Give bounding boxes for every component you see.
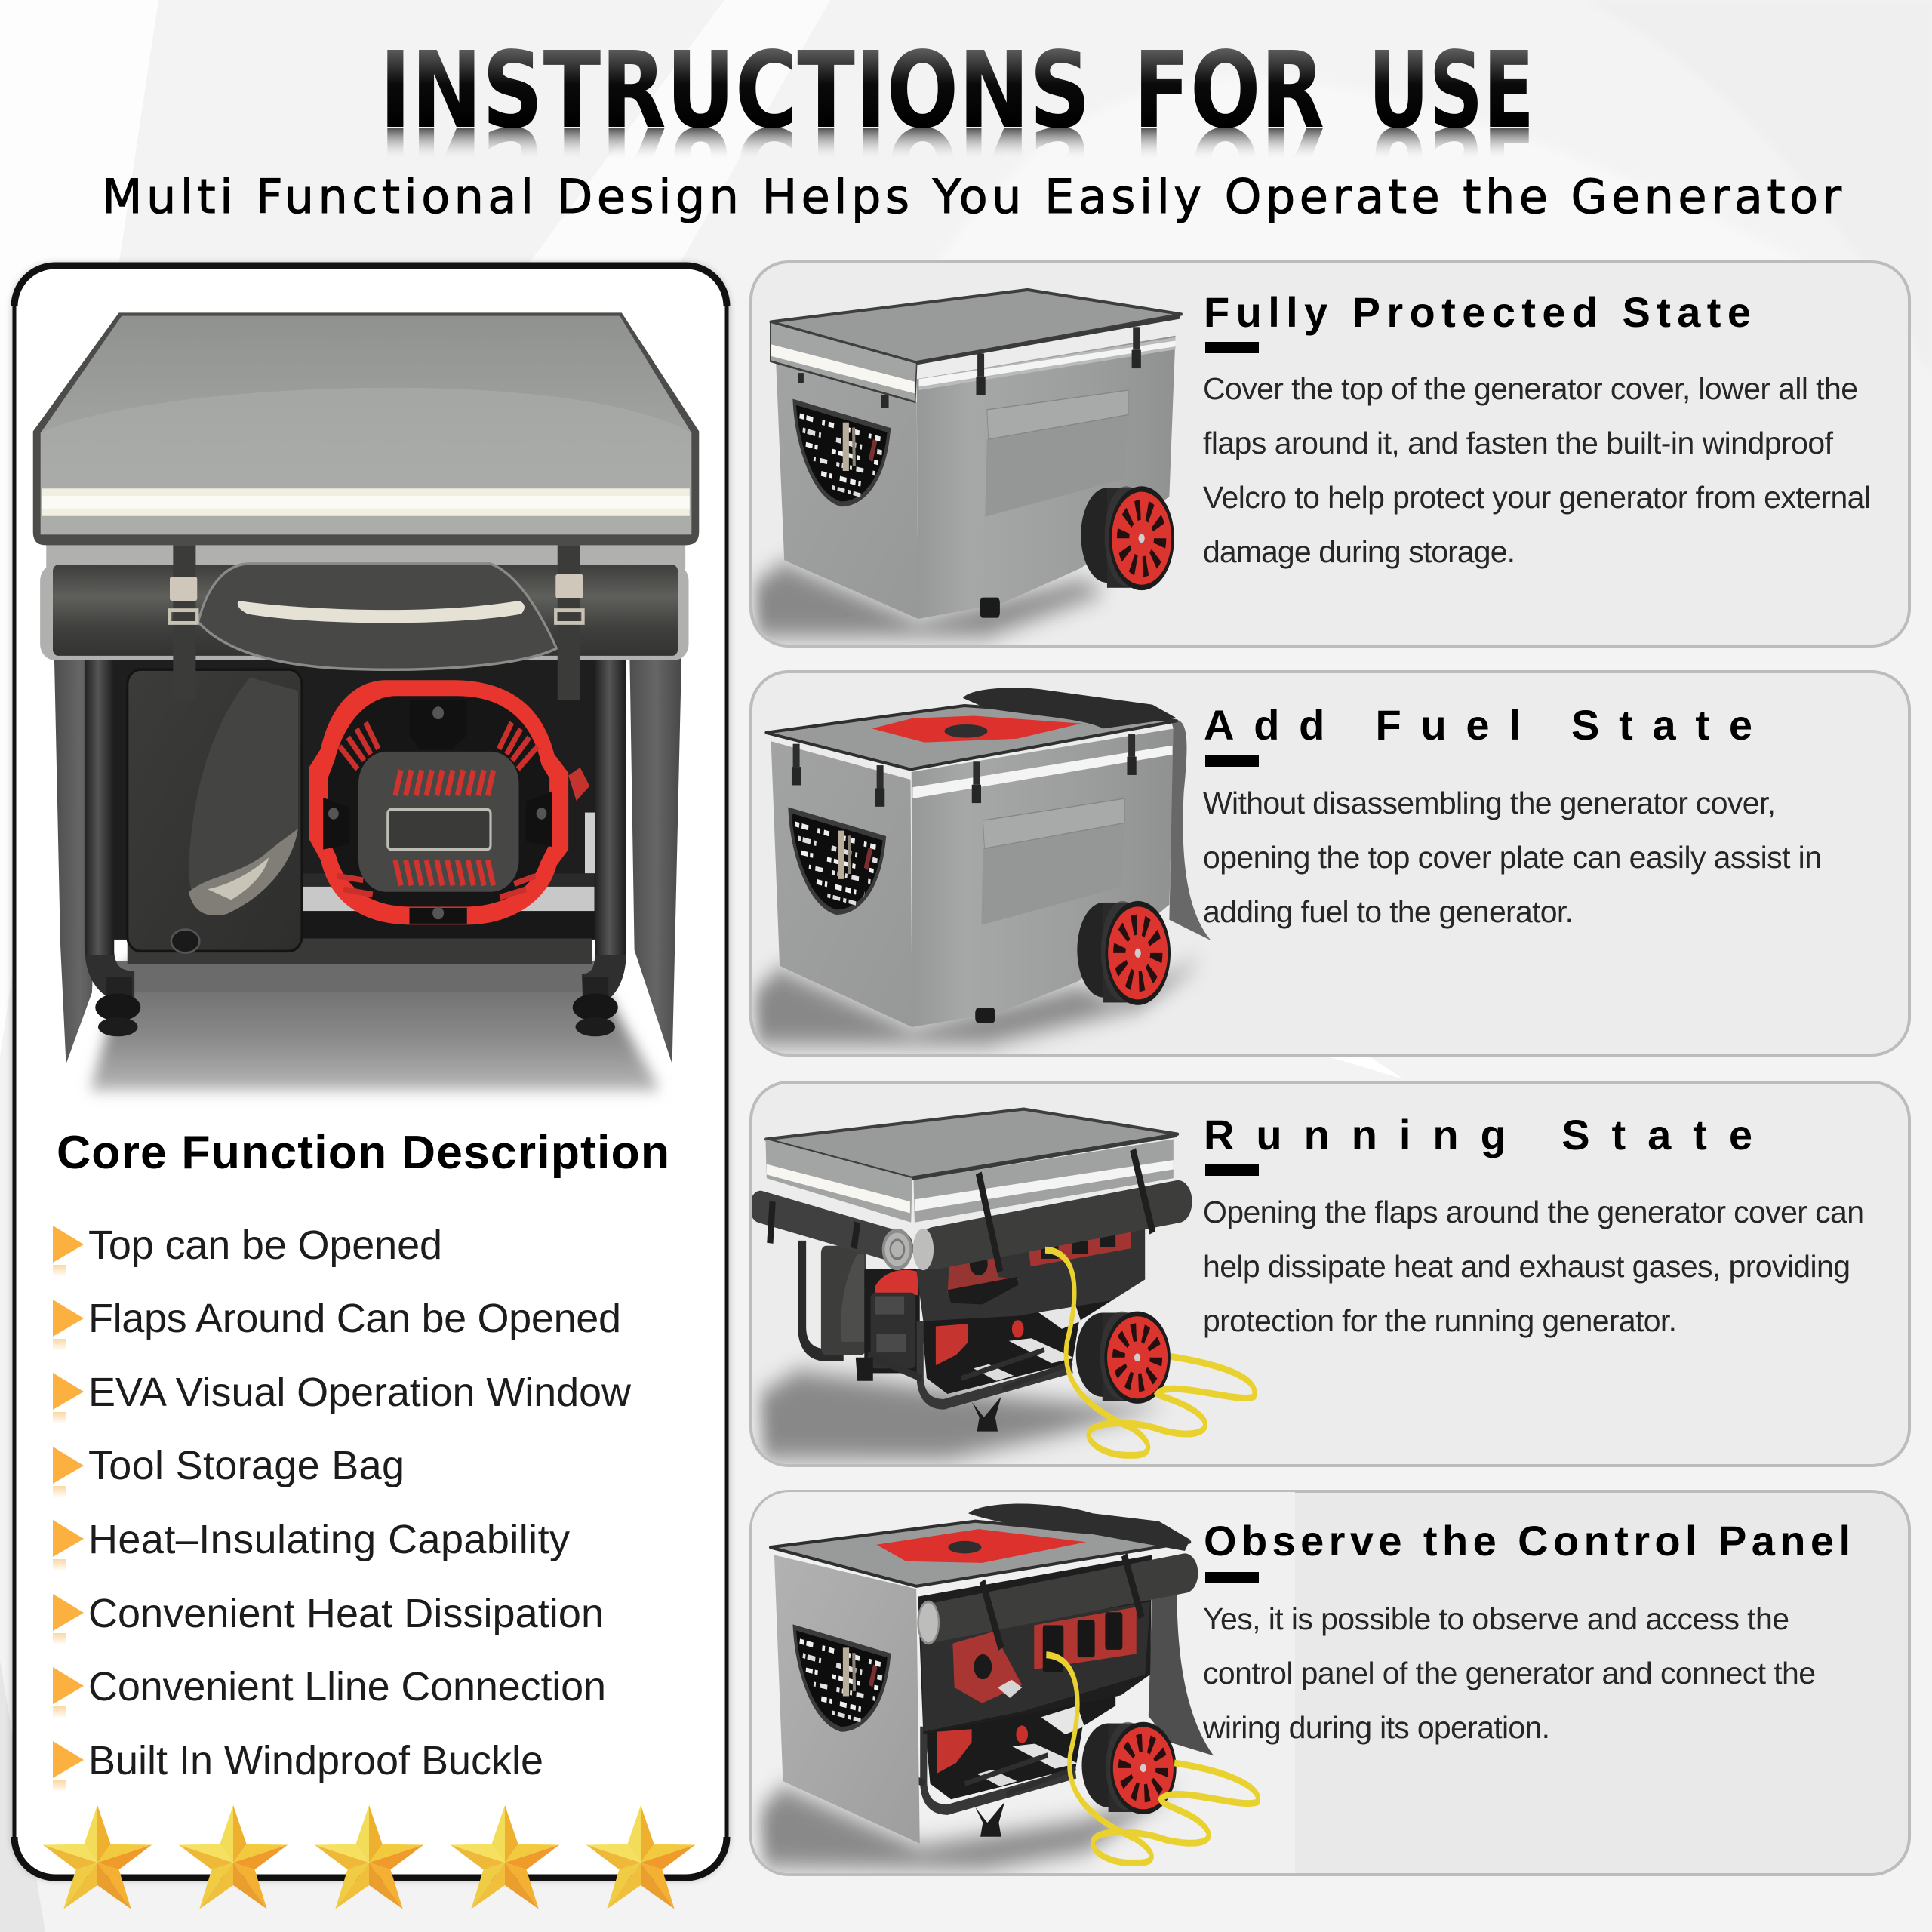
straps [792, 734, 1137, 807]
heading: Running State [1204, 1111, 1752, 1158]
upper intake slats [337, 722, 537, 897]
wheel [1081, 1722, 1177, 1814]
lower red tank [936, 1324, 968, 1365]
shadow [755, 563, 1109, 637]
accent bar [1205, 755, 1259, 767]
rolled side flap [918, 1574, 1185, 1644]
lid [771, 290, 1182, 402]
wheel [1077, 901, 1171, 1005]
body faces [776, 336, 1176, 619]
frame tubes [85, 659, 626, 992]
title [387, 48, 1529, 154]
description [1203, 786, 1822, 929]
description: wiring during its operation. [1202, 1710, 1550, 1745]
description: Without disassembling the generator cover, [1203, 786, 1776, 820]
description: protection for the running generator. [1203, 1303, 1677, 1338]
fuel tank [128, 669, 302, 952]
control panel [916, 1223, 1145, 1321]
rolled top flap [963, 688, 1177, 728]
straps and buckles [170, 545, 583, 700]
open fuel hatch [876, 1529, 1086, 1563]
wheel [1076, 1312, 1171, 1404]
panel: fully protected state [751, 262, 1909, 646]
wheel [1081, 486, 1174, 590]
straps [982, 1555, 1142, 1648]
lid [33, 312, 699, 545]
panel: observe the control panel [751, 1491, 1909, 1875]
panel: running state [751, 1082, 1909, 1466]
tool pocket [981, 798, 1124, 925]
feature list [53, 1223, 632, 1792]
tool pocket [198, 564, 557, 669]
engine [309, 680, 589, 924]
description: help dissipate heat and exhaust gases, providing [1203, 1249, 1850, 1284]
feature list: Convenient Heat Dissipation [88, 1591, 604, 1636]
feature list: Heat–Insulating Capability [88, 1517, 570, 1562]
description [1202, 1601, 1816, 1745]
rear tube and tank [802, 1241, 866, 1355]
description: opening the top cover plate can easily assist in [1203, 840, 1822, 875]
top [766, 706, 1177, 769]
brackets [323, 700, 552, 924]
description: Cover the top of the generator cover, lower all the [1203, 371, 1858, 406]
title: INSTRUCTIONS [380, 29, 1091, 152]
illustration: fuel access [755, 688, 1211, 1045]
yellow extension cable [1046, 1655, 1258, 1863]
heading: Add Fuel State [1204, 701, 1752, 749]
feature list: Top can be Opened [88, 1223, 442, 1268]
frame interior [111, 659, 601, 940]
feet [95, 977, 618, 1036]
shadow [761, 1784, 1183, 1869]
top [770, 1521, 1190, 1586]
viewing window [795, 402, 889, 504]
machine body [918, 1555, 1152, 1774]
accent bar [1205, 342, 1259, 353]
feature list: EVA Visual Operation Window [88, 1370, 632, 1415]
straps [798, 327, 1141, 408]
feature list: Tool Storage Bag [88, 1443, 405, 1488]
description: damage during storage. [1203, 534, 1515, 569]
side flaps [54, 657, 681, 1064]
lid [765, 1109, 1178, 1223]
description: Opening the flaps around the generator cover can [1203, 1195, 1864, 1229]
ground shadow [90, 961, 660, 1091]
description: Yes, it is possible to observe and access the [1203, 1601, 1789, 1636]
panel: core functions [14, 266, 727, 1909]
illustration: control panel access [761, 1503, 1258, 1869]
title: FOR [1134, 103, 1324, 226]
feature list: Built In Windproof Buckle [88, 1738, 543, 1783]
accent bar [1205, 1164, 1259, 1176]
heading: Observe the Control Panel [1204, 1517, 1850, 1564]
feature list: Flaps Around Can be Opened [88, 1296, 621, 1341]
rear foot [856, 1358, 873, 1381]
rolled top flap [968, 1503, 1190, 1551]
feature list: Convenient Lline Connection [88, 1664, 606, 1709]
yellow extension cable [1045, 1250, 1255, 1455]
subtitle: Multi Functional Design Helps You Easily Operate the Generator [102, 169, 1841, 224]
description [1203, 371, 1871, 569]
illustration: covered generator [755, 290, 1182, 637]
shadow [755, 961, 1204, 1045]
description: flaps around it, and fasten the built-in windproof [1203, 426, 1834, 460]
engine [864, 1269, 920, 1373]
side flap [1169, 719, 1211, 940]
viewing window [795, 1627, 889, 1729]
main generator illustration [33, 312, 699, 1091]
stripe [912, 746, 1172, 798]
foot [975, 1008, 995, 1023]
chassis and frame [871, 1682, 1115, 1837]
title: USE [1368, 29, 1534, 152]
shadow [761, 1371, 1169, 1459]
viewing window [790, 811, 884, 912]
five star rating [43, 1805, 695, 1909]
straps [770, 1149, 1152, 1272]
title: USE [1368, 103, 1534, 226]
description: control panel of the generator and connect the [1203, 1656, 1816, 1690]
panel: add fuel state [751, 672, 1909, 1055]
accent bar [1205, 1572, 1259, 1583]
open fuel hatch [872, 715, 1081, 743]
title: INSTRUCTIONS [380, 103, 1091, 226]
stripe [919, 337, 1176, 390]
vents [395, 770, 494, 885]
rolled flaps [761, 1201, 1178, 1270]
right side flap [1149, 1592, 1214, 1755]
description: Velcro to help protect your generator from external [1203, 480, 1871, 515]
heading: core function description: Core Function Description [57, 1126, 669, 1179]
left cover panel [774, 1555, 920, 1844]
body faces [771, 728, 1174, 1027]
tool pocket [985, 390, 1128, 517]
foot [980, 598, 1000, 618]
heading: Fully Protected State [1204, 288, 1751, 336]
title: FOR [1134, 29, 1324, 152]
chassis and frame [868, 1277, 1112, 1432]
illustration: running generator [761, 1109, 1255, 1459]
description: adding fuel to the generator. [1203, 894, 1574, 929]
rolled flap [40, 543, 688, 660]
description [1203, 1195, 1864, 1338]
